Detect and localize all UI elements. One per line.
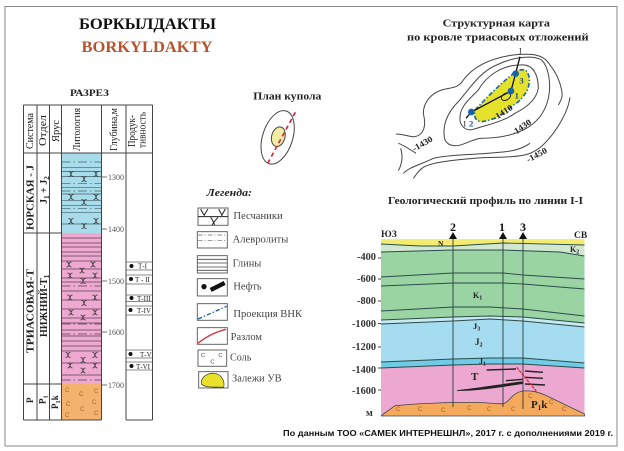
- layer labels: 1: [483, 362, 486, 368]
- profile line: [466, 57, 520, 118]
- layer labels: [438, 239, 579, 412]
- salt marks: C: [467, 406, 472, 412]
- layers: [381, 239, 584, 416]
- orientation labels: [381, 230, 588, 241]
- productivity horizons: Т-IV: [137, 307, 151, 315]
- depth scale: 1700: [108, 381, 124, 390]
- legend item: siltstone: [197, 232, 289, 248]
- depth axis: м: [366, 408, 373, 419]
- system and series labels: P: [50, 404, 60, 409]
- orientation labels: ЮЗ: [381, 230, 397, 240]
- depth scale: 1300: [108, 173, 124, 182]
- wells: 1: [499, 220, 505, 234]
- system and series labels: P: [25, 397, 35, 403]
- column headers: [25, 108, 148, 151]
- legend item: salt: Соль: [230, 352, 252, 363]
- contour labels: [410, 102, 549, 164]
- legend item: water-oil contact projection: Проекция ВНК: [233, 309, 302, 320]
- wells: 2: [450, 220, 456, 234]
- productivity horizons: Т-III: [137, 295, 151, 303]
- salt marks: C: [441, 408, 446, 414]
- layer labels: P: [531, 399, 538, 411]
- productivity horizons: Т - II: [135, 276, 150, 284]
- layer labels: J: [479, 357, 483, 366]
- layer labels: 2: [576, 250, 579, 256]
- legend item: fault: [197, 328, 263, 344]
- contours: [460, 65, 538, 130]
- fault: [517, 367, 537, 392]
- depth axis: -1400: [352, 365, 376, 376]
- well and line labels: I: [463, 120, 466, 129]
- heading: dome plan: План купола: [253, 92, 321, 103]
- layer labels: T: [471, 371, 479, 383]
- wells: [468, 70, 519, 115]
- salt marks: C: [528, 394, 533, 400]
- column headers: тивность: [138, 112, 148, 148]
- salt marks: C: [511, 407, 516, 413]
- title: BORKYLDAKTY: [82, 39, 212, 56]
- lithology column: C: [65, 388, 70, 394]
- column headers: Система: [25, 113, 36, 149]
- legend item: salt: [198, 350, 252, 366]
- well and line labels: 1: [515, 90, 519, 100]
- legend item: siltstone: Алевролиты: [233, 234, 289, 245]
- depth scale: [102, 173, 124, 390]
- heading: section: РАЗРЕЗ: [70, 88, 109, 98]
- heading: structural map: по кровле триасовых отложений: [407, 33, 589, 44]
- lithology column: C: [94, 389, 99, 395]
- system and series labels: + J: [39, 180, 50, 196]
- heading: legend: Легенда:: [205, 188, 252, 199]
- system and series labels: 1: [42, 395, 50, 398]
- system and series labels: 2: [43, 176, 51, 180]
- legend item: oil: Нефть: [233, 282, 262, 293]
- layer labels: J: [475, 337, 480, 347]
- salt marks: C: [418, 407, 423, 413]
- layer boundaries: [381, 243, 584, 368]
- legend item: salt: C: [218, 353, 222, 359]
- productivity horizons: Т-V: [140, 351, 152, 359]
- panel: stratigraphic section: [24, 88, 152, 420]
- lithology column: C: [92, 400, 97, 406]
- salt marks: C: [396, 407, 401, 413]
- depth axis: -800: [357, 296, 376, 307]
- layer labels: J: [473, 321, 477, 331]
- deposit outline: [269, 125, 287, 148]
- heading: geological profile: Геологический профиль по линии I-I: [388, 195, 583, 207]
- panel: structural map: [396, 19, 589, 178]
- system and series labels: k: [50, 395, 60, 400]
- panel: dome plan: [253, 92, 321, 168]
- well and line labels: 2: [469, 119, 473, 129]
- system and series labels: J: [39, 199, 50, 204]
- column headers: Ярус: [51, 120, 62, 142]
- layer labels: 3: [477, 326, 480, 332]
- contour labels: -1450: [525, 145, 549, 164]
- salt marks: C: [487, 407, 492, 413]
- depth scale: 1500: [108, 277, 124, 286]
- productivity horizons: Т-VI: [136, 363, 151, 371]
- system and series labels: [25, 165, 62, 409]
- depth axis: -400: [357, 252, 376, 263]
- contour labels: -1430: [410, 134, 434, 153]
- title: [79, 16, 216, 56]
- heading: structural map: [407, 19, 589, 44]
- source note: По данным ТОО «САМЕК ИНТЕРНЕШНЛ», 2017 г. с дополнениями 2019 г.: [283, 428, 613, 438]
- column headers: Продук-: [127, 115, 138, 147]
- well and line labels: I: [519, 46, 522, 55]
- lithology column: [62, 153, 102, 420]
- lithology column: C: [80, 407, 85, 413]
- layer labels: K: [473, 291, 479, 300]
- legend item: salt: C: [210, 360, 214, 366]
- heading: structural map: Структурная карта: [443, 19, 550, 30]
- lithology column: C: [79, 392, 84, 398]
- legend item: sandstone: [198, 208, 283, 225]
- depth axis: -600: [357, 274, 376, 285]
- layer labels: 1: [479, 296, 482, 302]
- system and series labels: P: [38, 398, 48, 404]
- deposit with water-oil contact: [474, 70, 529, 122]
- depth axis: -1600: [352, 386, 376, 397]
- system and series labels: 1: [55, 400, 62, 404]
- layer labels: 1: [538, 404, 542, 412]
- panel: geological profile: [352, 195, 588, 419]
- depth axis: -1000: [352, 319, 376, 330]
- legend item: oil: [197, 279, 262, 296]
- depth axis: [352, 252, 381, 419]
- column headers: Литология: [72, 108, 83, 151]
- legend item: fault: Разлом: [231, 332, 263, 343]
- well and line labels: [463, 46, 524, 129]
- legend item: clay: [197, 256, 262, 273]
- wells: 3: [520, 220, 526, 234]
- oil bodies: [487, 369, 545, 385]
- legend item: hydrocarbon deposits: Залежи УВ: [232, 374, 282, 385]
- legend item: clay: Глины: [233, 258, 262, 269]
- column headers: Отдел: [38, 115, 49, 146]
- depth scale: 1400: [108, 225, 124, 234]
- dome outline: [255, 106, 300, 168]
- panel: legend: [197, 188, 302, 388]
- system and series labels: ТРИАСОВАЯ-Т: [26, 269, 36, 353]
- legend item: sandstone: Песчаники: [233, 211, 283, 222]
- layer labels: K: [570, 245, 576, 254]
- fault line: [267, 112, 295, 164]
- lithology column: C: [65, 413, 70, 419]
- layer labels: N: [438, 239, 444, 248]
- productivity horizons: [126, 262, 152, 371]
- contour labels: -1430: [509, 117, 533, 138]
- layer labels: 2: [480, 342, 482, 348]
- productivity horizons: Т-I: [138, 262, 148, 270]
- legend item: water-oil contact projection: [197, 304, 302, 320]
- depth axis: -1200: [352, 342, 376, 353]
- salt marks: C: [549, 400, 554, 406]
- legend item: salt: C: [201, 353, 205, 359]
- layer labels: k: [541, 399, 548, 411]
- system and series labels: 1: [43, 274, 51, 278]
- well and line labels: 3: [519, 75, 524, 85]
- table grid: [24, 105, 152, 420]
- wells: [449, 220, 527, 409]
- contour labels: -1410: [491, 102, 515, 123]
- column headers: Глубина,м: [109, 108, 120, 151]
- salt marks: C: [562, 407, 567, 413]
- system and series labels: НИЖНИЙ-Т: [39, 278, 50, 337]
- legend item: hydrocarbon deposits: [199, 372, 282, 388]
- system and series labels: 1: [43, 195, 51, 199]
- orientation labels: СВ: [574, 231, 588, 241]
- salt marks: [396, 394, 567, 414]
- lithology column: C: [94, 411, 99, 417]
- title: БОРКЫЛДАКТЫ: [79, 16, 216, 33]
- lithology column: C: [66, 402, 71, 408]
- depth scale: 1600: [108, 328, 124, 337]
- system and series labels: ЮРСКАЯ - J: [26, 165, 36, 230]
